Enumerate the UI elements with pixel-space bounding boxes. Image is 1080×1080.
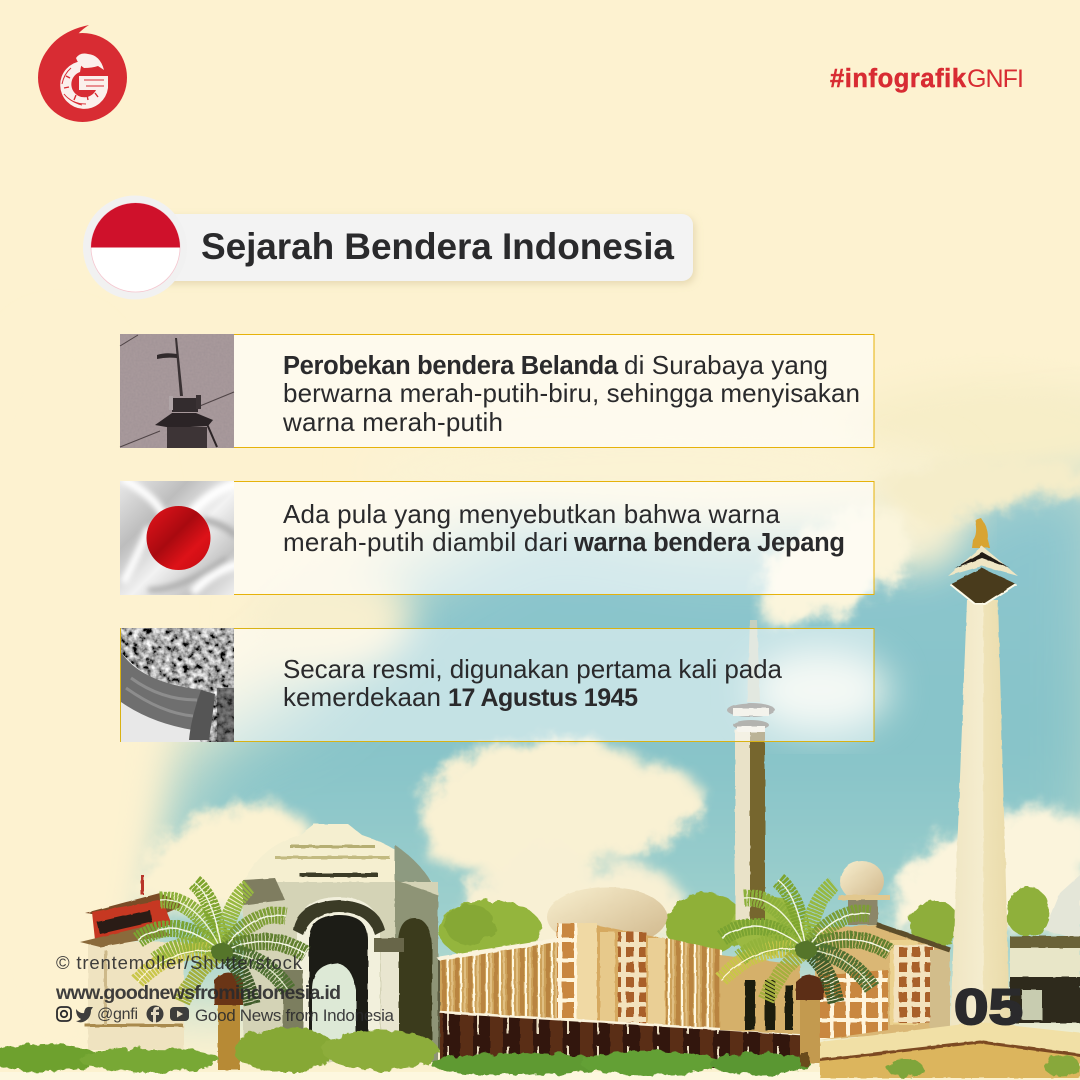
photo: Japanese flag	[120, 481, 234, 595]
palm trees	[137, 880, 890, 1070]
illustration: Jakarta landmarks skyline	[0, 518, 1080, 1080]
text: kemerdekaan	[283, 682, 441, 712]
photo credit: © trentemoller/Shutterstock	[56, 952, 303, 973]
panel: card 1	[120, 334, 874, 448]
page number: 05	[954, 979, 1023, 1035]
text: warna bendera Jepang	[573, 529, 845, 557]
icon: facebook	[146, 1006, 164, 1023]
logo: GNFI	[38, 25, 127, 122]
text: di Surabaya yang	[624, 350, 828, 380]
panel: card 3	[120, 628, 874, 742]
left red-roofed tower	[80, 875, 185, 1050]
gazebo monument	[243, 824, 446, 1062]
text	[283, 654, 783, 712]
title banner	[83, 196, 693, 300]
website: www.goodnewsfromindonesia.id	[55, 982, 341, 1004]
right white building	[1010, 875, 1080, 1023]
clouds	[130, 457, 1080, 950]
logo emblem: garuda G	[60, 54, 108, 109]
trees behind buildings	[438, 887, 1050, 960]
text	[283, 499, 845, 557]
facebook and youtube name: Good News from Indonesia	[195, 1006, 395, 1025]
text: Secara resmi, digunakan pertama kali pada	[283, 654, 783, 684]
photo: proclamation crowd	[121, 628, 234, 742]
icon: twitter	[76, 1007, 93, 1022]
hashtag: #infografik	[830, 65, 967, 93]
icon: youtube	[170, 1007, 189, 1021]
shrubs and foreground	[0, 1028, 1080, 1080]
monument Monas	[948, 518, 1018, 1030]
icon: instagram	[57, 1007, 71, 1021]
handle: @gnfi	[97, 1006, 138, 1023]
Istiqlal mosque	[436, 861, 950, 1068]
panel: card 2	[120, 480, 874, 595]
monument platform	[820, 1022, 1080, 1078]
minaret	[727, 620, 775, 920]
footer: credit and social	[55, 952, 395, 1025]
text: merah-putih diambil dari	[283, 527, 568, 557]
photo: flag tower	[120, 334, 234, 448]
text: Ada pula yang menyebutkan bahwa warna	[283, 499, 781, 529]
text: warna merah-putih	[282, 407, 503, 437]
hashtag: GNFI	[967, 65, 1024, 93]
text: berwarna merah-putih-biru, sehingga menyisakan	[283, 378, 860, 408]
text	[282, 350, 860, 437]
text: Perobekan bendera Belanda	[283, 352, 619, 380]
text: 17 Agustus 1945	[448, 684, 638, 712]
icon: Indonesian flag	[83, 196, 187, 300]
heading: Sejarah Bendera Indonesia	[201, 226, 674, 267]
